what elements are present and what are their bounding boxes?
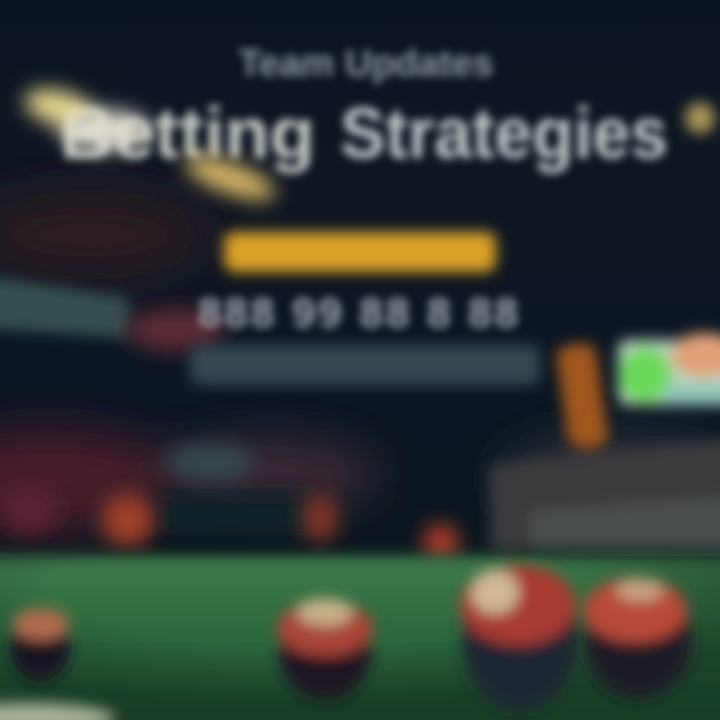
ball 4: [583, 578, 692, 698]
stands: centre band: [190, 345, 540, 385]
scoreboard: [618, 333, 720, 405]
dark tier: [160, 495, 310, 535]
reddish haze: [0, 190, 720, 530]
title: Strategies: [340, 94, 668, 174]
title glow lower: [180, 147, 280, 209]
ball 2: [277, 598, 373, 700]
title glow middle: [60, 110, 150, 150]
ball 1: [10, 608, 70, 682]
teal crowd patch: [165, 444, 255, 480]
title: [21, 82, 668, 209]
yellow button: [224, 232, 496, 272]
pitch: [0, 556, 720, 720]
pitch corner line: [0, 703, 115, 720]
subtitle: Team Updates: [238, 43, 494, 85]
date line: 888 99 88 8 88: [198, 289, 518, 336]
goal structure right: [490, 438, 720, 550]
star glow: [685, 102, 715, 134]
stands: red accent: [125, 308, 225, 352]
stands: left band: [0, 275, 130, 338]
title glow left: [21, 82, 99, 134]
orange figure: [556, 343, 608, 449]
pitch shading: [0, 556, 720, 720]
ball 3: [460, 565, 578, 710]
red crowd spots: [0, 486, 459, 560]
title: Betting: [60, 94, 315, 174]
